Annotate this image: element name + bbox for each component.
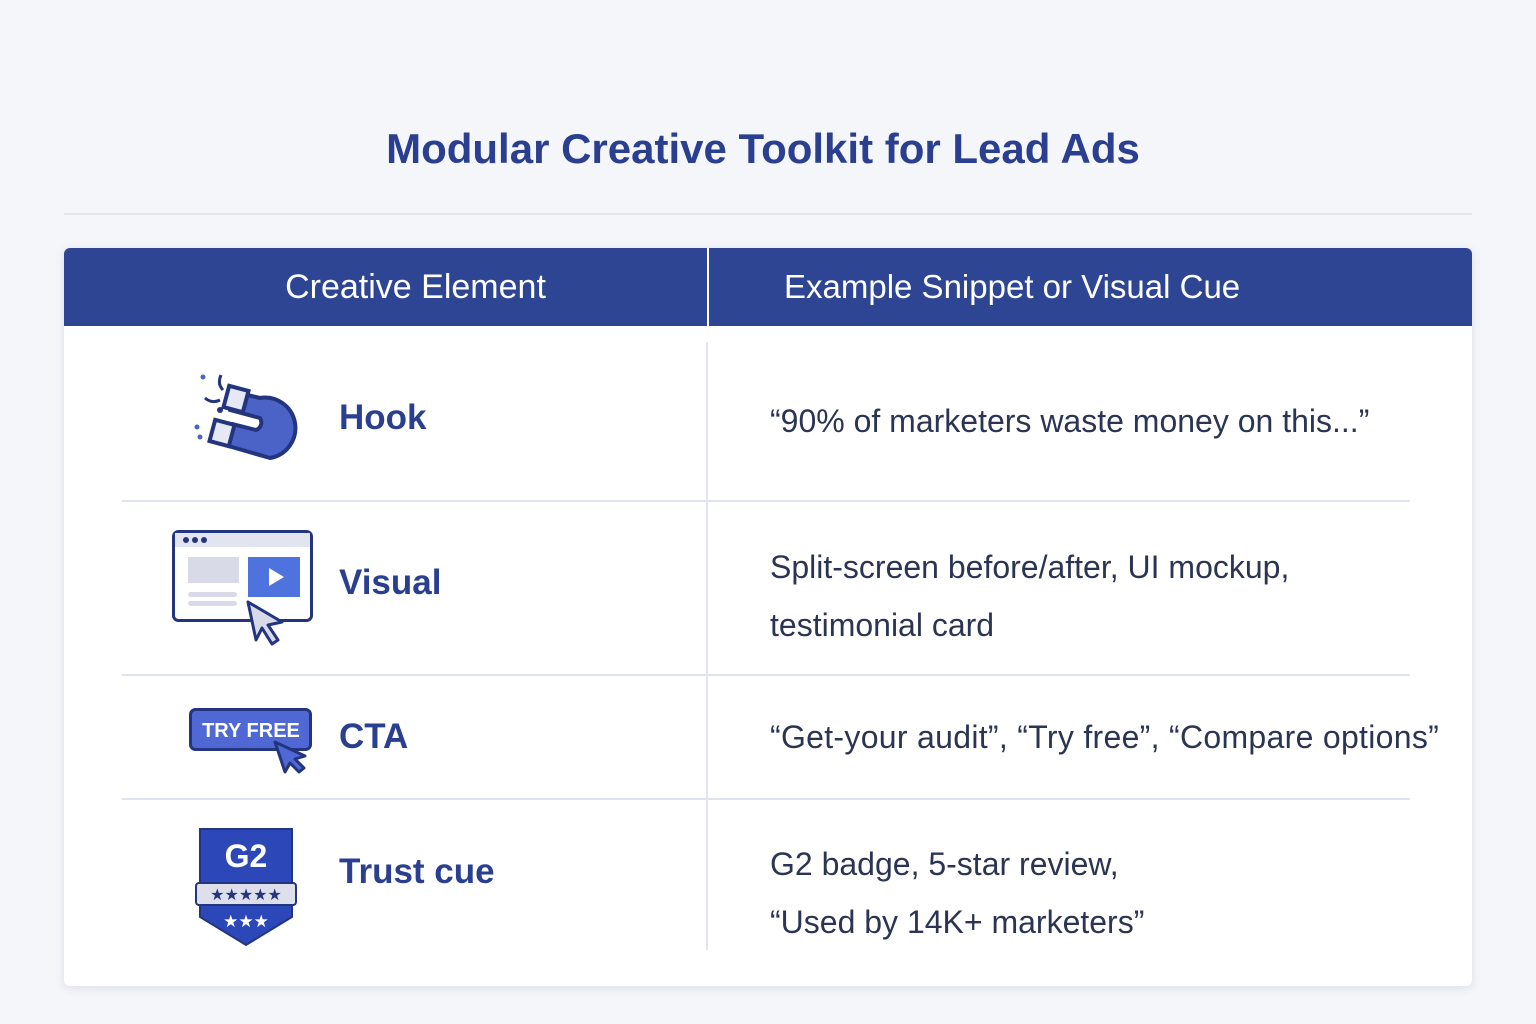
- icon: g2 badge: ★★★: [223, 912, 269, 931]
- text: trust example: “Used by 14K+ marketers”: [770, 904, 1144, 940]
- text: visual example: [770, 549, 1289, 643]
- icon: magnet: [194, 374, 298, 460]
- text: trust example: [770, 846, 1144, 940]
- icon: g2 badge: [195, 828, 297, 946]
- title: Modular Creative Toolkit for Lead Ads: [386, 125, 1140, 172]
- header: creative element: Creative Element: [285, 268, 546, 306]
- label: cta: CTA: [339, 717, 408, 756]
- text: visual example: Split-screen before/after, UI mockup,: [770, 549, 1289, 585]
- label: visual: Visual: [339, 563, 441, 602]
- icon: try free button: TRY FREE: [202, 720, 300, 742]
- table header: [64, 248, 1472, 326]
- icon: g2 badge: G2: [225, 838, 267, 874]
- text: visual example: testimonial card: [770, 607, 994, 643]
- label: hook: Hook: [339, 398, 426, 437]
- icon: browser with cursor: [172, 530, 313, 646]
- text: trust example: G2 badge, 5-star review,: [770, 846, 1119, 882]
- icon: try free button: [189, 708, 312, 774]
- label: trust cue: Trust cue: [339, 852, 495, 891]
- icon: g2 badge: ★★★★★: [210, 887, 282, 904]
- text: hook example: “90% of marketers waste money on this...”: [770, 403, 1369, 439]
- text: cta example: “Get-your audit”, “Try free”, “Compare options”: [770, 719, 1439, 755]
- header: example snippet: Example Snippet or Visual Cue: [784, 268, 1240, 305]
- table card: [64, 248, 1472, 986]
